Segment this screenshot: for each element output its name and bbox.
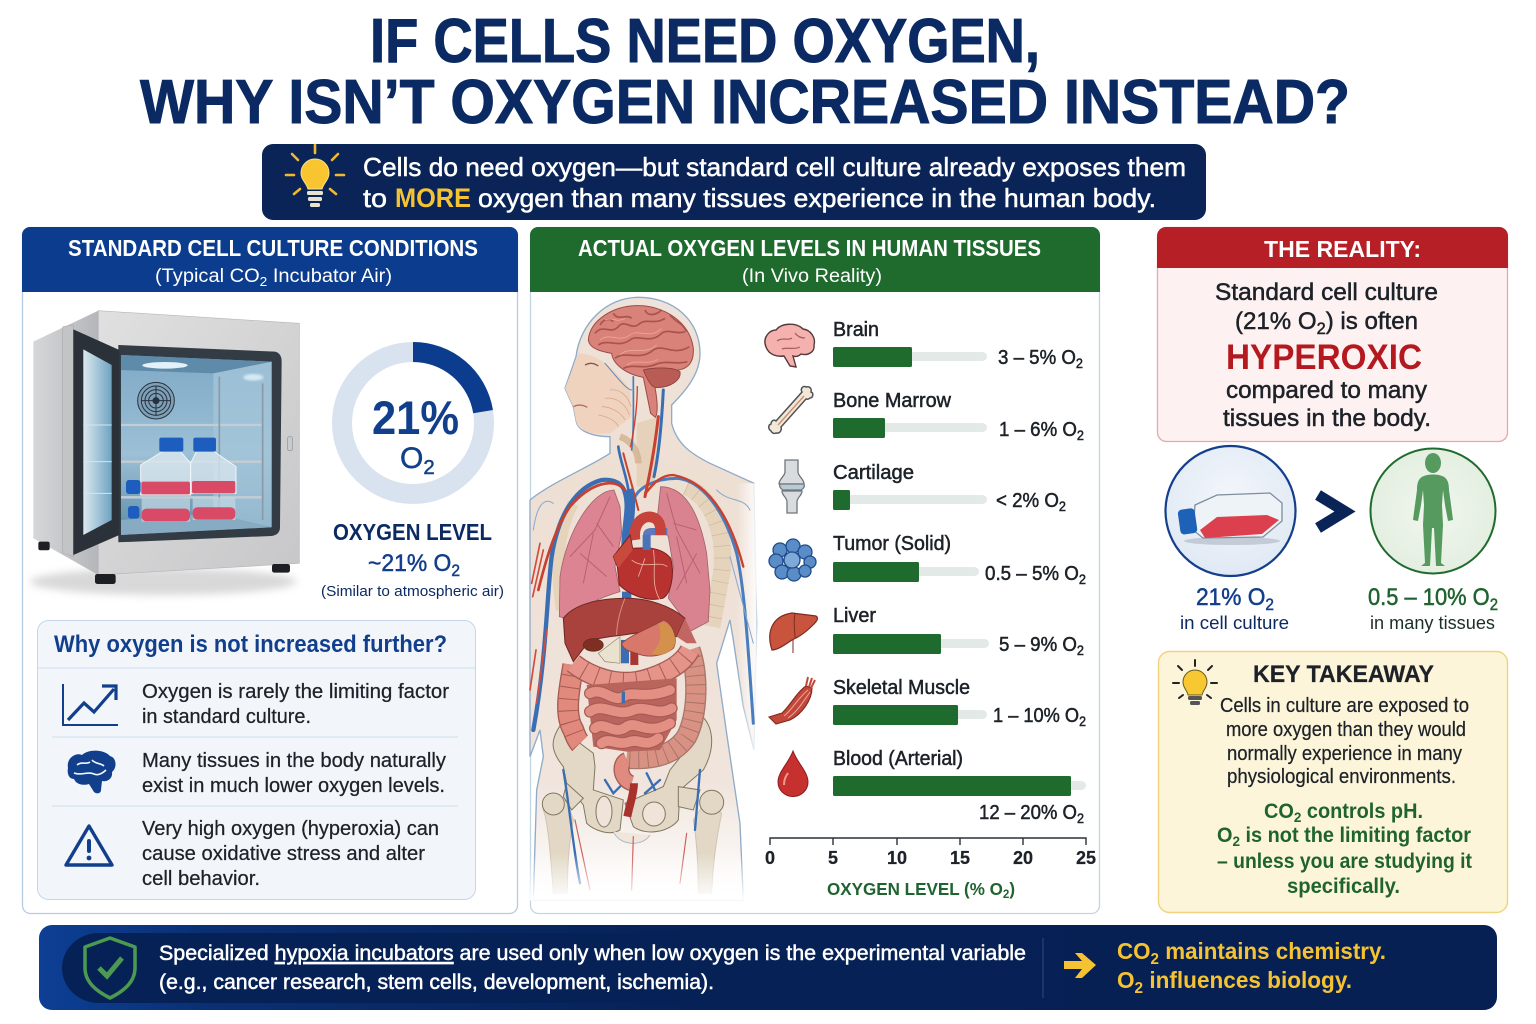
conclusion text	[1117, 938, 1386, 997]
row: brain: 3 – 5% O	[998, 347, 1081, 369]
reason 3: Very high oxygen (hyperoxia) can	[142, 818, 439, 840]
fan	[138, 382, 174, 419]
panel: standard cell culture conditions	[22, 227, 518, 914]
title: IF CELLS NEED OXYGEN,	[370, 7, 1040, 76]
skeleton: pelvis and femurs	[542, 713, 724, 893]
panel: actual oxygen levels	[530, 227, 1100, 914]
row: brain: 2	[1076, 356, 1083, 371]
panel: the reality: THE REALITY:	[1264, 236, 1421, 262]
row: skeletal muscle: 2	[1079, 714, 1086, 729]
label: 21% in cell culture: 2	[1265, 596, 1274, 614]
row: cartilage: Cartilage	[833, 462, 914, 484]
icon: blood drop	[778, 751, 808, 796]
row: blood: Blood (Arterial)	[833, 748, 963, 770]
intro banner	[262, 144, 1206, 220]
takeaway highlight: O	[1217, 824, 1233, 847]
label: 21% in cell culture	[1180, 584, 1289, 633]
arrow: greater than	[1318, 495, 1345, 528]
reason 3: cause oxidative stress and alter	[142, 843, 425, 865]
takeaway text: more oxygen than they would	[1226, 719, 1466, 741]
axis: 2	[1003, 887, 1010, 901]
panel: the reality: HYPEROXIC	[1226, 338, 1422, 377]
row: brain	[765, 319, 1083, 371]
row: skeletal muscle: Skeletal Muscle	[833, 677, 970, 699]
donut chart: 21% oxygen	[342, 352, 484, 494]
row: tumor: 2	[1079, 572, 1086, 587]
vessels	[530, 363, 753, 890]
small intestine	[587, 678, 677, 752]
intro banner: to	[363, 183, 387, 213]
icon: brain	[68, 751, 116, 793]
takeaway highlight	[1217, 800, 1472, 898]
human anatomy illustration	[530, 297, 763, 901]
axis: )	[1009, 879, 1015, 899]
icon: light bulb	[1173, 660, 1217, 705]
conclusion text: 2	[1151, 951, 1159, 968]
conclusion text: O	[1117, 967, 1135, 993]
row: blood: 12 – 20% O	[979, 802, 1085, 824]
heart	[613, 535, 672, 600]
panel: why oxygen is not increased further: Why oxygen is not increased further?	[54, 631, 447, 658]
icon: culture flask	[1166, 446, 1296, 576]
hypoxia text: Specialized hypoxia incubators are used only when low oxygen is the experimental variable	[159, 942, 1026, 965]
icon: rising chart	[63, 684, 118, 725]
panel: the reality: ) is often	[1326, 308, 1418, 335]
oxygen level text: (Similar to atmospheric air)	[321, 583, 504, 600]
face	[565, 353, 632, 434]
takeaway text: Cells in culture are exposed to	[1220, 695, 1469, 717]
takeaway highlight: is not the limiting factor	[1240, 824, 1471, 847]
icon: liver	[770, 613, 817, 653]
row: tumor: Tumor (Solid)	[833, 533, 951, 555]
conclusion text: CO	[1117, 938, 1152, 964]
label: 0.5–10% in tissues	[1368, 584, 1498, 633]
axis: OXYGEN LEVEL (% O	[827, 879, 1008, 899]
intro banner: Cells do need oxygen—but standard cell culture already exposes them	[363, 152, 1186, 182]
row: liver	[770, 605, 1084, 658]
icon: light bulb	[286, 145, 344, 207]
panel: key takeaway: KEY TAKEAWAY	[1253, 661, 1434, 688]
hypoxia text	[159, 942, 1026, 994]
vena cava and arches	[627, 490, 630, 547]
row: tumor: 0.5 – 5% O	[985, 563, 1085, 585]
aortic arch	[635, 517, 661, 540]
ribs	[558, 487, 723, 627]
heading: actual levels: (In Vivo Reality)	[742, 266, 882, 287]
label: 0.5–10% in tissues: 0.5 – 10% O	[1368, 584, 1501, 611]
bottom banner	[39, 925, 1497, 1010]
reason 2: Many tissues in the body naturally	[142, 750, 446, 772]
rectum	[621, 760, 632, 783]
panel: the reality	[1157, 227, 1508, 442]
panel: the reality: tissues in the body.	[1223, 405, 1431, 432]
row: cartilage: 2	[1059, 499, 1066, 514]
icon: warning	[66, 826, 112, 865]
takeaway text	[1220, 695, 1469, 788]
icon: human silhouette	[1370, 448, 1496, 574]
reason 3: cell behavior.	[142, 868, 260, 890]
flasks	[141, 451, 191, 495]
axis: 25	[1076, 848, 1096, 868]
heading: standard conditions	[68, 235, 478, 289]
heading: actual levels	[578, 235, 1041, 287]
row: cartilage: < 2% O	[996, 490, 1063, 512]
row: liver: 5 – 9% O	[999, 634, 1082, 656]
takeaway highlight: specifically.	[1287, 875, 1400, 898]
row: blood	[778, 748, 1086, 826]
oxygen level text: OXYGEN LEVEL	[333, 519, 492, 545]
title	[140, 7, 1350, 137]
row: cartilage	[779, 460, 1066, 514]
axis: 15	[950, 848, 970, 868]
conclusion text: 2	[1135, 980, 1143, 997]
icon: brain	[765, 324, 814, 367]
row: bone marrow: Bone Marrow	[833, 390, 952, 412]
brain	[588, 306, 693, 417]
takeaway highlight: 2	[1232, 834, 1240, 850]
icon: shield check	[85, 938, 135, 998]
reason 3	[142, 818, 439, 890]
donut chart: 21% oxygen: O	[400, 442, 423, 475]
oxygen level text: ~21% O	[368, 550, 455, 577]
panel: the reality: 2	[1317, 320, 1326, 338]
heading: standard conditions: (Typical CO	[155, 266, 254, 287]
label: 0.5–10% in tissues: in many tissues	[1370, 613, 1495, 633]
reason 1	[142, 681, 449, 728]
heading: actual levels: ACTUAL OXYGEN LEVELS IN HUMAN TISSUES	[578, 235, 1041, 261]
takeaway highlight: CO	[1264, 800, 1296, 823]
label: 21% in cell culture: 21% O	[1196, 584, 1269, 611]
chart: tissue oxygen levels	[765, 319, 1096, 901]
icon: muscle	[769, 677, 815, 724]
row: brain: Brain	[833, 319, 879, 341]
takeaway highlight: 2	[1294, 810, 1301, 826]
reason 1: Oxygen is rarely the limiting factor	[142, 681, 449, 703]
donut chart: 21% oxygen: 2	[423, 457, 435, 479]
panel: why oxygen is not increased further	[38, 620, 476, 900]
icon: tumor cells	[769, 539, 816, 581]
door	[73, 329, 119, 555]
conclusion text: maintains chemistry.	[1159, 938, 1386, 964]
hypoxia text: (e.g., cancer research, stem cells, development, ischemia).	[159, 971, 714, 994]
lungs	[559, 487, 710, 633]
label: 0.5–10% in tissues: 2	[1490, 596, 1498, 614]
row: liver: 2	[1077, 643, 1084, 658]
feet	[38, 542, 290, 584]
icon: bone	[769, 386, 813, 433]
title: WHY ISN’T OXYGEN INCREASED INSTEAD?	[140, 68, 1350, 137]
abdominal vessels	[613, 640, 637, 663]
reason 2: exist in much lower oxygen levels.	[142, 775, 445, 797]
axis	[765, 838, 1096, 901]
panel: the reality: Standard cell culture	[1215, 279, 1438, 306]
axis: 10	[887, 848, 907, 868]
axis: 20	[1013, 848, 1033, 868]
row: bone marrow: 1 – 6% O	[999, 419, 1082, 441]
heading: standard conditions: Incubator Air)	[267, 266, 392, 287]
axis: 0	[765, 848, 775, 868]
intro banner: MORE	[395, 183, 471, 213]
label: 21% in cell culture: in cell culture	[1180, 613, 1289, 633]
row: liver: Liver	[833, 605, 876, 627]
takeaway highlight: controls pH.	[1301, 800, 1423, 823]
row: skeletal muscle	[769, 677, 1086, 729]
conclusion text: influences biology.	[1143, 967, 1352, 993]
incubator illustration	[30, 311, 299, 595]
neck and trachea	[637, 417, 658, 487]
row: skeletal muscle: 1 – 10% O	[993, 705, 1088, 727]
panel: the reality: (21% O	[1235, 308, 1316, 335]
axis: 5	[828, 848, 838, 868]
panel: the reality: compared to many	[1226, 377, 1427, 404]
reason 1: in standard culture.	[142, 706, 311, 728]
heading: standard conditions: STANDARD CELL CULTURE CONDITIONS	[68, 235, 478, 261]
reason 2	[142, 750, 446, 797]
donut chart: 21% oxygen: 21%	[372, 391, 459, 444]
panel: key takeaway	[1158, 652, 1508, 912]
row: tumor	[769, 533, 1086, 587]
comparison: culture flask versus body	[1166, 446, 1498, 633]
arrow: leads to	[1064, 953, 1096, 978]
intro banner: oxygen than many tissues experience in the human body.	[478, 183, 1156, 213]
takeaway highlight: – unless you are studying it	[1217, 850, 1472, 873]
icon: knee joint	[779, 460, 804, 513]
colon	[568, 650, 696, 759]
stomach	[622, 620, 675, 656]
row: blood: 2	[1077, 811, 1084, 826]
oxygen level text: 2	[451, 562, 460, 580]
takeaway text: physiological environments.	[1227, 766, 1456, 788]
row: bone marrow: 2	[1077, 428, 1084, 443]
heading: standard conditions: 2	[260, 274, 267, 289]
row: bone marrow	[769, 386, 1084, 443]
oxygen level text	[321, 519, 504, 600]
liver	[563, 598, 697, 662]
takeaway text: normally experience in many	[1227, 743, 1462, 765]
